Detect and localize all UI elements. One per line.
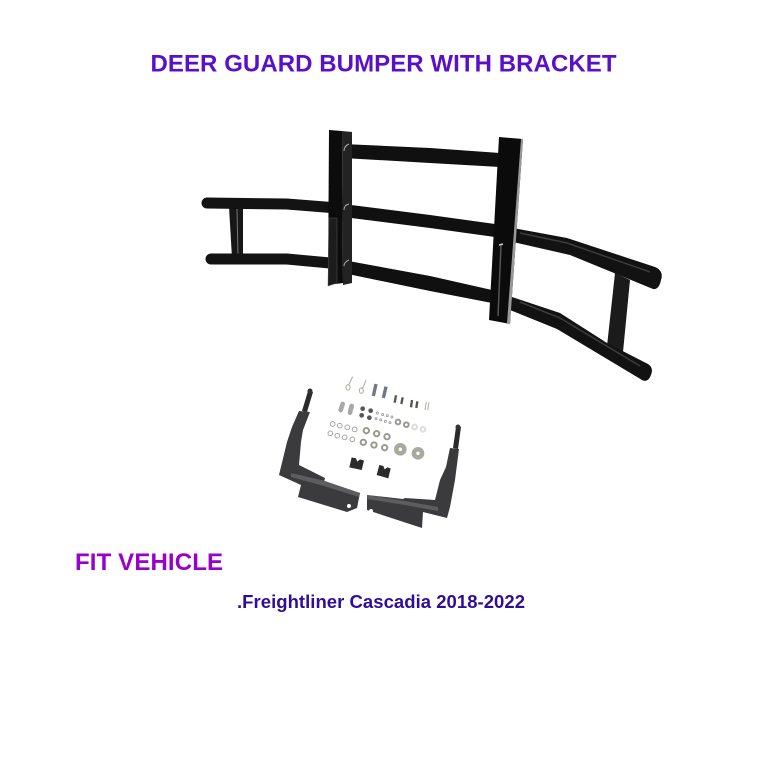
lower tube	[343, 260, 492, 303]
tube highlights	[520, 233, 650, 366]
product image: deer guard bumper	[207, 144, 662, 381]
hardware	[328, 377, 429, 478]
right lower tube	[510, 297, 652, 381]
medium washers	[361, 420, 409, 450]
vehicle fitment text: .Freightliner Cascadia 2018-2022	[237, 591, 525, 612]
heading: fit vehicle: FIT VEHICLE	[75, 549, 223, 576]
top tube	[343, 144, 500, 167]
left mounting bracket	[279, 388, 360, 512]
title: DEER GUARD BUMPER WITH BRACKET	[150, 50, 617, 78]
nuts	[359, 406, 373, 420]
right upper tube	[513, 228, 662, 289]
right mounting bracket	[367, 424, 461, 528]
small washers	[328, 412, 393, 442]
clips	[349, 457, 391, 478]
middle tube	[343, 204, 495, 237]
sleeves	[341, 404, 352, 413]
left outer tubes	[207, 203, 331, 263]
right vertical tube	[607, 273, 630, 352]
left post	[328, 130, 352, 286]
right post	[489, 137, 523, 324]
pins and bolts	[346, 377, 366, 393]
large washers	[394, 443, 424, 460]
